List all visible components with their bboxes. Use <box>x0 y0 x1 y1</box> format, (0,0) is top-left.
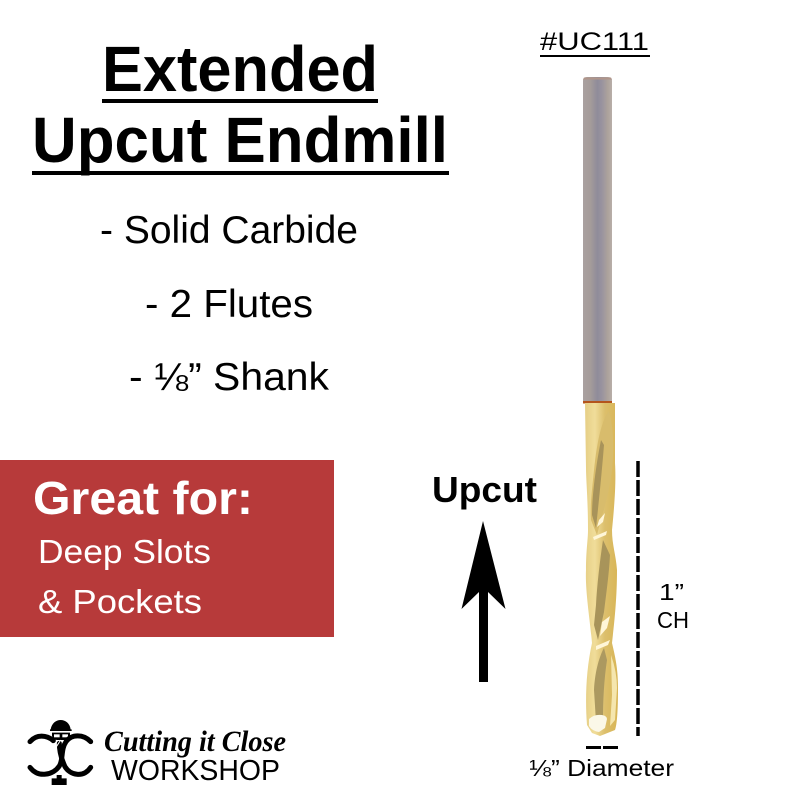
arrow: upcut direction <box>462 521 506 682</box>
logo script text: Cutting it Close <box>104 725 286 758</box>
flutes <box>585 403 618 736</box>
cut height label: 1” <box>659 579 684 605</box>
panel heading: Great for: <box>33 472 253 524</box>
panel text: Deep Slots <box>38 533 211 570</box>
logo <box>30 720 286 787</box>
panel text: & Pockets <box>38 583 202 620</box>
title <box>32 33 449 176</box>
endmill bit <box>583 77 618 736</box>
part number: #UC111 <box>540 28 649 56</box>
feature list: - Solid Carbide <box>100 209 358 252</box>
cut height dashed line <box>636 461 640 736</box>
diameter line <box>586 746 619 749</box>
cut height label <box>657 579 689 633</box>
panel text <box>38 533 211 620</box>
shank <box>583 77 612 404</box>
feature list <box>100 209 358 399</box>
upcut label: Upcut <box>432 469 537 510</box>
icon: workshop logo <box>30 720 91 785</box>
title: Upcut Endmill <box>32 104 448 176</box>
panel: great for <box>0 460 334 637</box>
feature list: - ⅛” Shank <box>129 356 330 399</box>
title: Extended <box>102 33 378 105</box>
feature list: - 2 Flutes <box>145 283 313 326</box>
cut height label: CH <box>657 607 689 633</box>
diameter label: ⅛” Diameter <box>529 755 674 781</box>
logo wordmark: WORKSHOP <box>111 755 280 787</box>
